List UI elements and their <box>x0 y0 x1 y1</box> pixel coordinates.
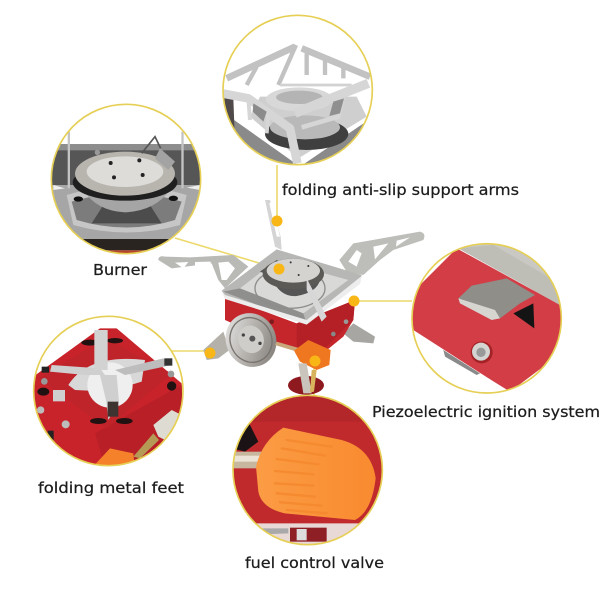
back arm <box>265 200 282 250</box>
panel: burner detail <box>50 102 203 258</box>
label: folding metal feet: folding metal feet <box>38 479 184 497</box>
knob <box>256 428 376 520</box>
valve stem and knob <box>133 433 159 458</box>
left foot <box>203 332 229 360</box>
right arm <box>339 232 424 275</box>
connector lines <box>172 165 412 395</box>
top plate <box>222 249 362 324</box>
label: folding anti-slip support arms: folding anti-slip support arms <box>282 181 519 199</box>
back arms <box>227 45 370 85</box>
valve stem <box>275 342 300 352</box>
stove illustration <box>158 200 424 395</box>
red body <box>225 297 355 358</box>
feet <box>68 359 145 392</box>
marker dots <box>204 216 360 366</box>
label: piezoelectric ignition system: Piezoelectric ignition system <box>372 403 600 421</box>
gas dial <box>217 305 285 375</box>
bowl <box>87 193 168 212</box>
rear-right foot <box>343 323 375 343</box>
front arms <box>222 83 368 163</box>
panel: folding metal feet detail <box>32 313 188 470</box>
burner <box>272 278 320 296</box>
base plate <box>234 120 364 164</box>
standing post <box>288 376 324 395</box>
panel: piezoelectric ignition detail <box>410 238 563 395</box>
label: burner: Burner <box>93 261 148 279</box>
left arm <box>158 255 248 288</box>
panel: fuel control valve detail <box>232 395 385 545</box>
slot <box>513 303 534 328</box>
label: fuel control valve: fuel control valve <box>245 554 384 572</box>
valve knob <box>294 340 331 370</box>
front arm <box>307 278 327 322</box>
panel: folding anti-slip support arms <box>220 13 377 170</box>
screw <box>471 341 493 363</box>
ignition button <box>458 278 535 318</box>
